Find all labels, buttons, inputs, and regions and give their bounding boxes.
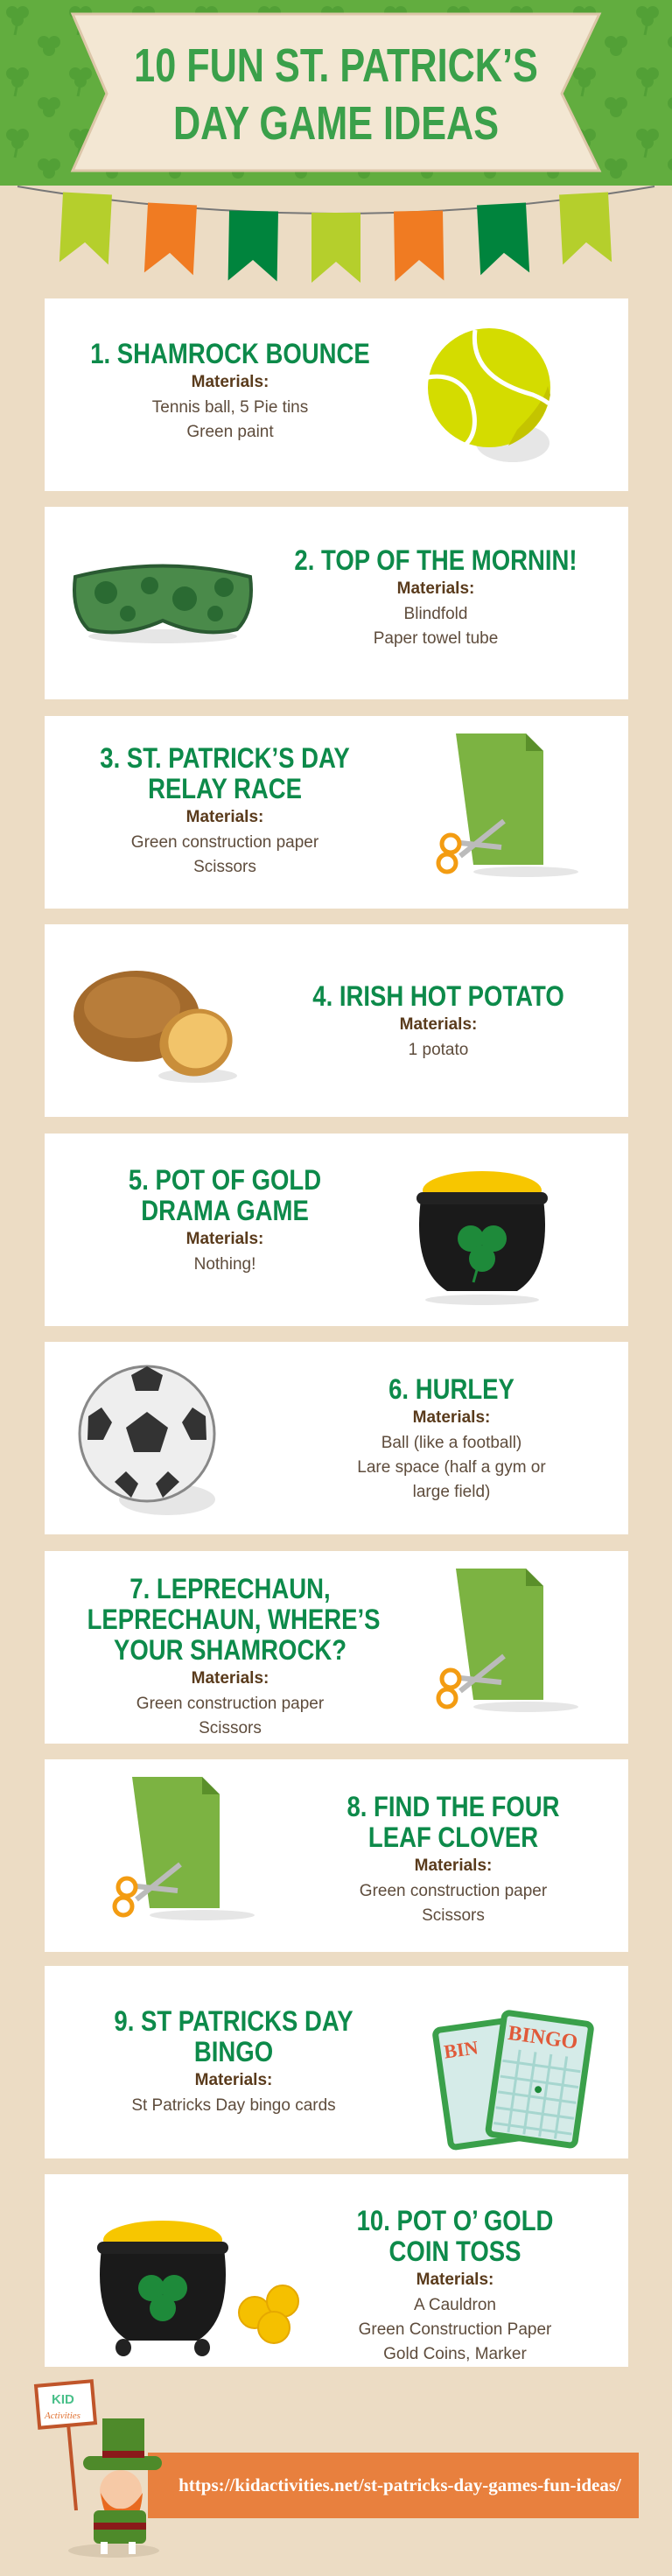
text: hurley: large field) — [413, 1483, 490, 1501]
text: hurley: Materials: — [413, 1408, 490, 1427]
card 1 — [45, 298, 628, 491]
text: hurley: 6. HURLEY — [388, 1373, 514, 1405]
icon: paper and scissors — [112, 1777, 255, 1920]
text: find the four leaf clover — [346, 1791, 560, 1925]
text: bingo — [114, 2005, 354, 2115]
footer url bar — [148, 2453, 639, 2518]
icon: paper and scissors — [436, 733, 578, 877]
text: leprechaun where's your shamrock — [88, 1573, 380, 1737]
bunting — [18, 186, 654, 283]
text: pot of gold drama game: 5. POT OF GOLD — [129, 1164, 321, 1196]
text: bingo: Materials: — [195, 2071, 272, 2089]
header: shamrock pattern — [0, 0, 672, 186]
text: find the four leaf clover: Materials: — [415, 1857, 492, 1875]
text: pot o gold coin toss: Materials: — [416, 2271, 494, 2289]
text: irish hot potato — [312, 980, 564, 1059]
text: pot o gold coin toss: Gold Coins, Marker — [383, 2345, 527, 2363]
icon: bingo cards: BINGO — [507, 2022, 579, 2054]
card 2 — [45, 507, 628, 699]
text: top of the mornin: Materials: — [397, 579, 474, 598]
text: pot of gold drama game — [129, 1164, 321, 1274]
title text: 10 FUN ST. PATRICK’S — [134, 39, 538, 92]
card 3 — [45, 716, 628, 909]
card 8 — [45, 1759, 628, 1952]
text: bingo: St Patricks Day bingo cards — [131, 2096, 336, 2115]
text: pot o gold coin toss: A Cauldron — [414, 2296, 496, 2314]
icon: bingo cards: BIN — [443, 2036, 480, 2063]
title banner — [70, 12, 602, 172]
text: relay race: Scissors — [193, 858, 256, 876]
text: top of the mornin: 2. TOP OF THE MORNIN! — [294, 544, 578, 576]
icon: potatoes — [74, 971, 237, 1083]
text: top of the mornin: Paper towel tube — [374, 629, 498, 648]
text: relay race: Green construction paper — [131, 833, 318, 852]
card 9 — [45, 1966, 628, 2158]
text: pot of gold drama game: Nothing! — [194, 1255, 256, 1274]
icon: leprechaun with sign: Activities — [44, 2411, 80, 2421]
text: top of the mornin: Blindfold — [404, 605, 467, 623]
title text — [134, 39, 538, 150]
text: pot of gold drama game: DRAMA GAME — [141, 1195, 309, 1226]
text: pot o gold coin toss: COIN TOSS — [389, 2236, 521, 2267]
text: find the four leaf clover: Scissors — [422, 1906, 485, 1925]
icon: cauldron and coins — [97, 2221, 299, 2356]
card 6 — [45, 1342, 628, 1534]
text: irish hot potato: 1 potato — [409, 1041, 468, 1059]
text: hurley: Lare space (half a gym or — [357, 1458, 546, 1477]
text: shamrock bounce: 1. SHAMROCK BOUNCE — [90, 338, 370, 369]
footer url bar: https://kidactivities.net/st-patricks-day-games-fun-ideas/ — [178, 2474, 621, 2495]
icon: soccer ball — [79, 1365, 215, 1515]
text: pot o gold coin toss — [357, 2205, 553, 2363]
text: relay race — [100, 742, 350, 876]
text: find the four leaf clover: LEAF CLOVER — [368, 1821, 538, 1853]
icon: leprechaun with sign: KID — [52, 2392, 74, 2407]
text: relay race: Materials: — [186, 808, 263, 826]
text: leprechaun where's your shamrock: 7. LEPRECHAUN, — [130, 1573, 331, 1604]
text: find the four leaf clover: 8. FIND THE FOUR — [346, 1791, 560, 1822]
text: leprechaun where's your shamrock: Scissors — [199, 1719, 262, 1737]
title text: DAY GAME IDEAS — [173, 97, 499, 150]
icon: bingo cards — [432, 2010, 594, 2150]
text: bingo: BINGO — [194, 2036, 273, 2067]
card 5 — [45, 1134, 628, 1326]
text: leprechaun where's your shamrock: YOUR SHAMROCK? — [114, 1634, 346, 1666]
text: hurley: Ball (like a football) — [382, 1434, 522, 1452]
text: relay race: 3. ST. PATRICK’S DAY — [100, 742, 350, 774]
text: top of the mornin — [294, 544, 578, 648]
text: pot o gold coin toss: Green Construction Paper — [359, 2320, 551, 2339]
text: leprechaun where's your shamrock: Materials: — [192, 1669, 269, 1688]
text: shamrock bounce — [90, 338, 370, 441]
text: shamrock bounce: Materials: — [192, 373, 269, 391]
icon: leprechaun with sign — [33, 2379, 162, 2558]
text: shamrock bounce: Tennis ball, 5 Pie tins — [152, 398, 308, 417]
text: hurley — [357, 1373, 546, 1501]
icon: pot of gold — [416, 1171, 548, 1305]
text: relay race: RELAY RACE — [148, 773, 302, 804]
text: leprechaun where's your shamrock: Green construction paper — [136, 1695, 324, 1713]
text: irish hot potato: Materials: — [400, 1015, 477, 1034]
text: pot of gold drama game: Materials: — [186, 1230, 263, 1248]
text: bingo: 9. ST PATRICKS DAY — [114, 2005, 354, 2037]
text: shamrock bounce: Green paint — [186, 423, 274, 441]
card 10 — [45, 2174, 628, 2367]
text: find the four leaf clover: Green construction paper — [360, 1882, 547, 1900]
card 7 — [45, 1551, 628, 1744]
icon: blindfold — [73, 564, 253, 643]
icon: tennis ball — [428, 328, 550, 462]
card 4 — [45, 924, 628, 1117]
icon: paper and scissors — [436, 1569, 578, 1712]
text: leprechaun where's your shamrock: LEPRECHAUN, WHERE’S — [88, 1604, 380, 1635]
text: pot o gold coin toss: 10. POT O’ GOLD — [357, 2205, 553, 2236]
text: irish hot potato: 4. IRISH HOT POTATO — [312, 980, 564, 1012]
